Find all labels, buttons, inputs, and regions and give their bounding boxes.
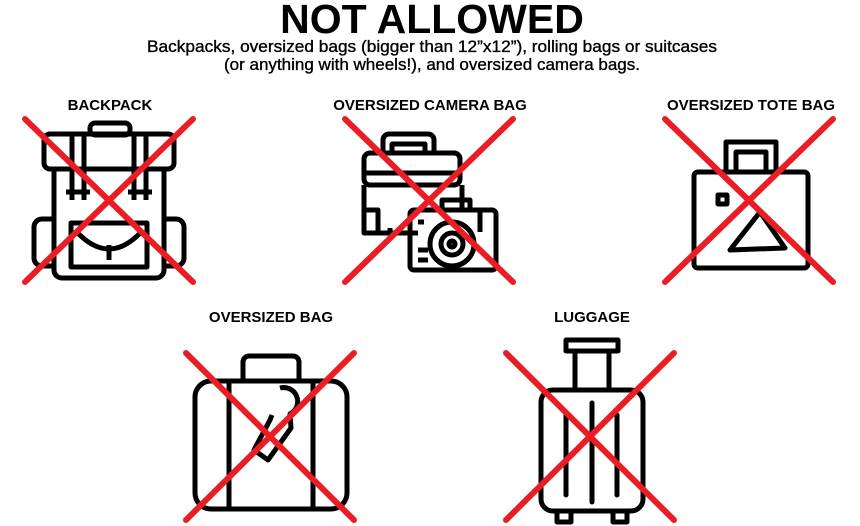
icon: tote <box>694 142 808 268</box>
red cross <box>506 353 674 520</box>
panel: luggage <box>506 309 674 522</box>
icon: suitcase <box>195 356 347 509</box>
subtitle: Backpacks, oversized bags (bigger than 12”x12”), rolling bags or suitcases <box>147 37 717 56</box>
panel: tote bag <box>665 97 835 282</box>
label: camera bag: OVERSIZED CAMERA BAG <box>333 97 527 114</box>
red cross <box>186 353 354 520</box>
subtitle <box>147 37 717 74</box>
panel: camera bag <box>333 97 527 282</box>
icon: backpack <box>34 123 184 278</box>
label: backpack: BACKPACK <box>68 97 153 114</box>
red cross <box>345 119 513 282</box>
panel: oversized bag <box>186 309 354 520</box>
label: luggage: LUGGAGE <box>554 309 630 326</box>
icon: camera bag <box>364 134 496 270</box>
panel: backpack <box>25 97 193 282</box>
label: oversized bag: OVERSIZED BAG <box>209 309 333 326</box>
label: tote bag: OVERSIZED TOTE BAG <box>667 97 835 114</box>
icon: luggage <box>541 340 643 522</box>
red cross <box>25 119 193 282</box>
subtitle: (or anything with wheels!), and oversized camera bags. <box>224 55 640 74</box>
red cross <box>665 119 833 282</box>
